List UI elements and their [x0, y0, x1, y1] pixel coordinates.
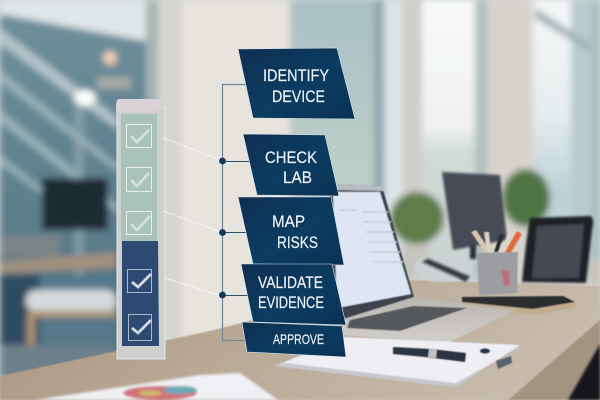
connector bracket	[219, 84, 252, 340]
checkbox 4	[128, 270, 152, 292]
back plant two	[502, 169, 550, 227]
wooden desk	[0, 280, 600, 400]
step: identify device: IDENTIFY	[263, 66, 329, 85]
bottom left chart paper	[35, 373, 278, 400]
checkbox 1	[126, 124, 152, 148]
step: map risks	[238, 197, 344, 265]
laptop keyboard	[347, 306, 467, 331]
step: check lab: CHECK	[265, 148, 318, 167]
laptop base	[335, 297, 515, 343]
step: approve: APPROVE	[273, 331, 324, 347]
office chair	[522, 216, 593, 283]
checklist column	[116, 99, 165, 359]
notebook	[462, 296, 575, 315]
pen on paper	[393, 347, 466, 362]
checkbox 2	[126, 168, 152, 192]
desk phone	[414, 254, 470, 282]
back plant one	[390, 192, 444, 278]
step: identify device	[238, 48, 355, 119]
laptop bezel	[330, 184, 414, 320]
paper on desk	[275, 337, 520, 387]
column body	[117, 108, 165, 359]
step: map risks: RISKS	[277, 233, 318, 252]
step: validate evidence: VALIDATE	[258, 274, 323, 292]
node 3	[219, 292, 226, 298]
node 1	[219, 158, 226, 164]
desk side	[508, 320, 600, 400]
laptop top edge	[332, 184, 384, 191]
laptop	[330, 184, 515, 343]
step: check lab	[243, 134, 339, 196]
dotted leader lines	[163, 138, 218, 295]
step: map risks: MAP	[272, 212, 305, 231]
monitor	[442, 172, 507, 259]
node 2	[219, 229, 226, 236]
laptop screen	[333, 192, 411, 308]
navy section	[122, 241, 159, 346]
checkbox 5	[128, 314, 152, 340]
foreground dark chair	[568, 344, 600, 400]
pen holder	[471, 230, 522, 295]
step: identify device: DEVICE	[272, 87, 325, 106]
step: validate evidence: EVIDENCE	[258, 294, 324, 312]
binder clip	[480, 348, 512, 369]
step: approve	[242, 322, 346, 357]
step: check lab: LAB	[283, 168, 312, 187]
column cap	[116, 99, 163, 112]
mint section	[121, 114, 157, 241]
step: validate evidence	[241, 264, 346, 325]
checkbox 3	[126, 212, 152, 234]
